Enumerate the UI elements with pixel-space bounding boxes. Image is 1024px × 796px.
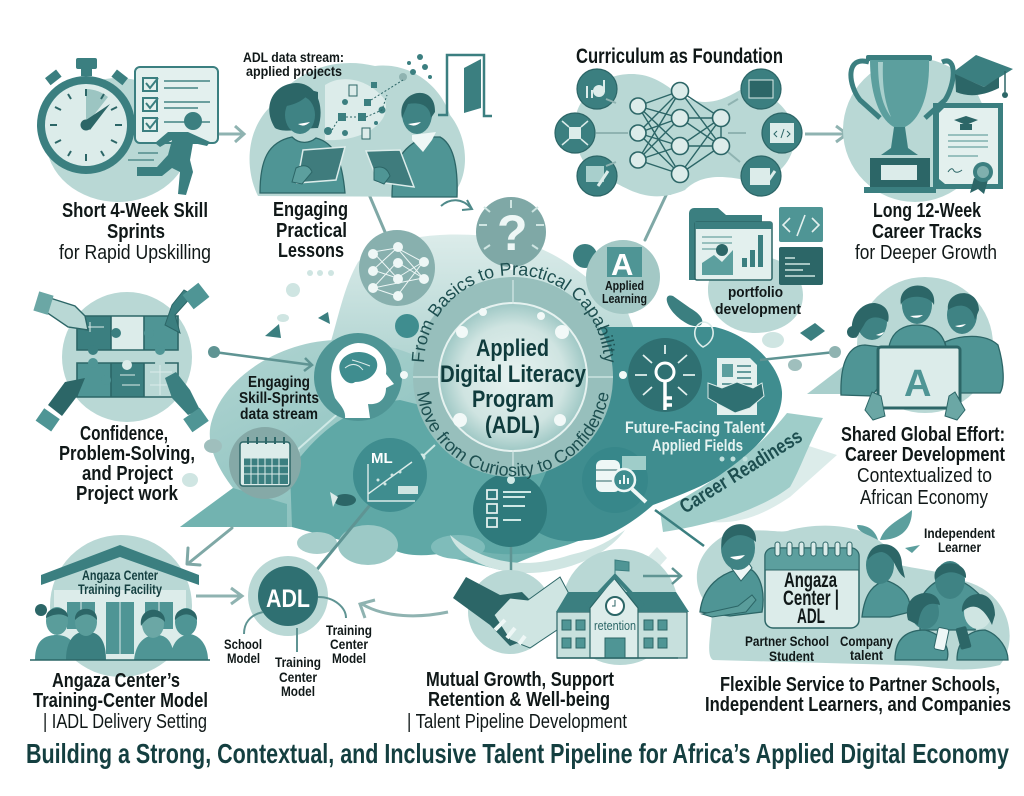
heading: Project work xyxy=(76,483,179,505)
panel: mutual growth xyxy=(407,549,689,733)
data stream label xyxy=(243,49,344,79)
calendar label: Angaza xyxy=(784,569,837,592)
heading: Angaza Center’s xyxy=(52,670,180,692)
center icons xyxy=(229,197,765,547)
ribbon: career readiness: Career Readiness xyxy=(676,425,806,518)
label xyxy=(625,418,765,455)
model labels: Training xyxy=(275,654,321,670)
heading: Long 12-Week xyxy=(873,200,982,222)
heading: Engaging xyxy=(273,199,348,221)
panel: training center model xyxy=(30,535,242,733)
icon: database and magnifier xyxy=(582,447,648,513)
heading: Mutual Growth, Support xyxy=(426,669,614,691)
subheading: for Rapid Upskilling xyxy=(59,242,211,264)
model labels: Model xyxy=(227,650,260,666)
icon: applied learning circle: A xyxy=(611,247,633,282)
label: development xyxy=(715,301,801,318)
ring text: top: From Basics to Practical Capability xyxy=(412,262,615,362)
audience labels xyxy=(745,525,995,664)
icon: portfolio folder and code windows xyxy=(689,207,823,333)
heading: Practical xyxy=(276,220,347,242)
icon: training facility with people xyxy=(30,535,210,677)
icon: trophy, diploma, cap xyxy=(843,55,1013,202)
arrow xyxy=(196,588,242,604)
central background cloud xyxy=(180,235,862,573)
heading: Career Tracks xyxy=(872,221,982,243)
icon: applied learning circle: Applied xyxy=(605,278,644,293)
panel: short sprints xyxy=(37,58,244,222)
icon: neural network xyxy=(555,69,802,196)
label: Applied Fields xyxy=(652,436,743,455)
arrow xyxy=(643,568,681,584)
heading xyxy=(855,200,997,264)
panel: long career tracks xyxy=(843,55,1013,264)
model labels: Model xyxy=(281,683,315,699)
icon: applied learning circle xyxy=(586,240,660,314)
icon: neural circle xyxy=(359,230,435,306)
main circle xyxy=(400,262,627,479)
icon: team around a tablet xyxy=(841,277,1003,420)
model labels: Center xyxy=(279,669,317,685)
icon: calendar xyxy=(229,427,301,499)
icon: resume and handshake xyxy=(708,358,764,415)
icon: ADL hub: ADL xyxy=(266,585,310,613)
model labels: School xyxy=(224,636,262,652)
program title: Digital Literacy xyxy=(440,361,587,388)
icon: people and calendar xyxy=(697,510,1010,669)
panel: flexible service xyxy=(697,510,1011,716)
panel: shared global effort xyxy=(841,277,1005,509)
heading xyxy=(407,669,627,733)
heading: Short 4-Week Skill xyxy=(62,200,208,222)
audience labels: Student xyxy=(769,648,814,664)
middle person xyxy=(889,325,946,347)
heading: | IADL Delivery Setting xyxy=(43,711,207,733)
heading: Problem-Solving, xyxy=(59,443,195,465)
label xyxy=(239,374,319,423)
facility label: Angaza Center xyxy=(82,567,158,583)
woman xyxy=(260,137,345,193)
icon: ML chart xyxy=(353,438,427,512)
icon: ADL hub xyxy=(244,556,346,652)
audience labels: talent xyxy=(850,647,883,663)
icon: key circle xyxy=(628,338,702,412)
man xyxy=(392,137,457,197)
arrow xyxy=(219,126,244,142)
heading xyxy=(273,199,348,262)
calendar label: Center | xyxy=(783,587,839,610)
panel: confidence and problem solving xyxy=(33,283,209,505)
program title: Program xyxy=(472,386,554,413)
trio dots xyxy=(720,456,748,462)
label: Engaging xyxy=(248,374,310,391)
facility label xyxy=(78,567,162,597)
connector lines xyxy=(187,177,841,578)
heading: Confidence, xyxy=(80,423,168,445)
panel: curriculum as foundation xyxy=(555,45,847,196)
label xyxy=(715,284,801,318)
facility label: Training Facility xyxy=(78,581,162,597)
label: Skill-Sprints xyxy=(239,390,319,407)
label: Future-Facing Talent xyxy=(625,418,765,437)
icon: team around a tablet: A xyxy=(904,363,931,405)
program title: Applied xyxy=(476,335,549,362)
program title: (ADL) xyxy=(485,412,540,439)
panel: ADL delivery models xyxy=(224,556,448,699)
calendar label xyxy=(783,569,839,628)
model labels xyxy=(224,622,372,699)
panel: portfolio development xyxy=(689,207,823,333)
calendar label: ADL xyxy=(797,605,825,628)
heading: Lessons xyxy=(278,240,344,262)
program title xyxy=(440,335,587,439)
heading xyxy=(59,423,195,505)
heading: Training-Center Model xyxy=(33,690,208,712)
icon: head with brain xyxy=(314,333,402,421)
icon: handshake and school xyxy=(453,549,689,665)
data stream label: applied projects xyxy=(246,63,342,79)
heading xyxy=(705,674,1011,716)
audience labels: Independent xyxy=(924,525,995,541)
panel: engaging practical lessons xyxy=(243,49,492,262)
icon: ML chart: ML xyxy=(371,450,393,467)
audience labels: Company xyxy=(840,633,893,649)
heading xyxy=(841,424,1005,509)
heading xyxy=(33,670,208,733)
heading: Contextualized to xyxy=(857,465,992,487)
heading: for Deeper Growth xyxy=(855,242,997,264)
icon: checklist circle xyxy=(473,473,547,547)
icon: learners sharing data xyxy=(250,54,492,197)
retention label: retention xyxy=(594,618,636,633)
right person xyxy=(945,336,1003,393)
arrow xyxy=(360,600,448,618)
data stream label: ADL data stream: xyxy=(243,49,344,65)
audience labels: Partner School xyxy=(745,633,829,649)
icon: applied learning circle: Learning xyxy=(602,291,647,306)
heading: Curriculum as Foundation xyxy=(576,45,783,68)
icon: puzzle and hands xyxy=(33,283,209,432)
model labels: Center xyxy=(330,636,368,652)
icon: question mark circle: ? xyxy=(497,205,528,261)
data xyxy=(349,85,357,96)
heading: | Talent Pipeline Development xyxy=(407,711,627,733)
label: data stream xyxy=(240,406,318,423)
left person xyxy=(841,345,880,396)
heading line: Sprints xyxy=(107,221,165,243)
icon: stopwatch and checklist xyxy=(37,58,218,202)
model labels: Model xyxy=(332,650,366,666)
ring text: bottom: Move from Curiosity to Confidence xyxy=(417,392,608,479)
icon: question mark circle xyxy=(476,197,546,267)
audience labels: Learner xyxy=(938,539,981,555)
arrow xyxy=(805,126,847,142)
heading: African Economy xyxy=(860,487,988,509)
model labels: Training xyxy=(326,622,372,638)
heading: Retention & Well-being xyxy=(428,689,610,711)
heading: and Project xyxy=(82,463,173,485)
label: portfolio xyxy=(728,284,783,301)
